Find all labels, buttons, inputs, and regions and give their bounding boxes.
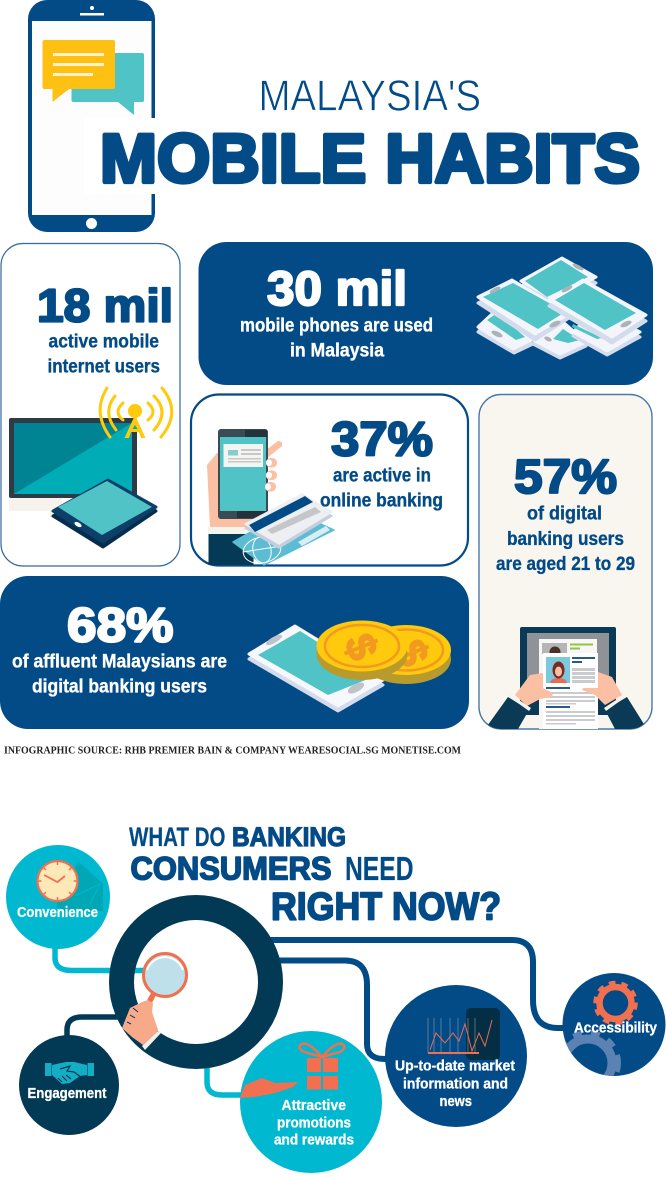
text: infographic source: INFOGRAPHIC SOURCE: RHB PREMIER BAIN & COMPANY WEARESOCIAL.SG MONETISE.COM — [4, 746, 461, 756]
text: mobile phones are used in Malaysia — [240, 316, 433, 362]
node: convenience — [6, 845, 110, 949]
text: are active in online banking: online banking — [320, 490, 443, 512]
node: engagement — [19, 1035, 119, 1135]
label: up-to-date market information and news: news — [440, 1094, 472, 1110]
heading: what do banking consumers need right now: WHAT DO — [129, 822, 226, 852]
icon: phone with market chart — [428, 1008, 500, 1060]
text: of digital banking users are aged 21 to 29: banking users — [507, 529, 624, 550]
stat: 37%: 37% — [331, 414, 433, 466]
label: attractive promotions and rewards: Attractive — [282, 1098, 346, 1114]
heading: what do banking consumers need right now — [129, 822, 501, 928]
node: attractive promotions and rewards — [240, 1031, 382, 1173]
icon: smartphone with gold coins: $ — [335, 627, 388, 666]
icon: monitor, antenna and tablet — [9, 388, 172, 547]
icon: hands holding documents in front of a tablet — [485, 627, 647, 729]
panel: 37% online banking — [191, 394, 468, 567]
title: Mobile Habits: MOBILE HABITS — [100, 120, 640, 197]
icon: hand holding phone with bank cards — [207, 429, 334, 567]
label: attractive promotions and rewards: promotions — [277, 1116, 351, 1132]
text: active mobile internet users — [48, 332, 160, 378]
text: active mobile internet users: active mobile — [48, 332, 159, 352]
icon: magnifying glass and hand — [122, 954, 186, 1050]
label: attractive promotions and rewards — [274, 1098, 354, 1148]
text: mobile phones are used in Malaysia: mobile phones are used — [240, 316, 433, 336]
icon: smartphone with gold coins: $ — [386, 633, 439, 672]
panel: 57% of digital banking users — [479, 394, 652, 729]
label: up-to-date market information and news — [395, 1058, 515, 1110]
icon: envelope and clock — [38, 861, 103, 911]
connector lines — [55, 940, 570, 1095]
panel: 18 mil active mobile internet users — [1, 244, 180, 566]
node: up-to-date market information and news — [385, 985, 527, 1127]
label: up-to-date market information and news: Up-to-date market — [395, 1058, 515, 1074]
stat: 18 mil: 18 mil — [37, 280, 173, 332]
text: mobile phones are used in Malaysia: in Malaysia — [290, 340, 384, 362]
heading: what do banking consumers need right now: RIGHT NOW? — [271, 886, 501, 928]
node: accessibility — [562, 973, 666, 1076]
heading: what do banking consumers need right now: CONSUMERS — [130, 850, 332, 886]
icon: stack of isometric phones — [478, 258, 646, 358]
heading: what do banking consumers need right now: BANKING — [232, 822, 346, 852]
label: accessibility: Accessibility — [574, 1020, 657, 1036]
title: Malaysia's: MALAYSIA'S — [258, 72, 481, 120]
text: active mobile internet users: internet users — [48, 356, 160, 378]
stat: 30 mil: 30 mil — [267, 263, 407, 316]
text: are active in online banking — [320, 466, 443, 512]
icon: handshake — [45, 1062, 94, 1084]
icon: gift on an open hand — [240, 1044, 345, 1098]
text: of digital banking users are aged 21 to 29: of digital — [527, 504, 602, 524]
heading: what do banking consumers need right now: NEED — [345, 850, 414, 887]
text: of digital banking users are aged 21 to 29 — [496, 504, 635, 575]
text: of affluent Malaysians are digital banking users: digital banking users — [32, 676, 207, 698]
label: up-to-date market information and news: information and — [403, 1076, 508, 1092]
label: engagement: Engagement — [28, 1086, 107, 1102]
panel: 68% affluent digital banking users — [0, 576, 469, 729]
ring: central magnifier ring — [122, 908, 270, 1056]
icon: smartphone with gold coins — [249, 620, 451, 711]
stat: 57%: 57% — [514, 451, 617, 504]
icon: gears — [565, 980, 638, 1076]
label: convenience: Convenience — [17, 905, 98, 921]
stat: 68%: 68% — [67, 600, 174, 652]
text: of digital banking users are aged 21 to 29: are aged 21 to 29 — [496, 554, 635, 575]
text: are active in online banking: are active in — [333, 466, 431, 486]
text: of affluent Malaysians are digital banking users — [12, 652, 227, 698]
text: of affluent Malaysians are digital banking users: of affluent Malaysians are — [12, 652, 227, 672]
panel: 30 mil mobile phones — [198, 242, 653, 385]
icon: smartphone with chat bubbles — [28, 0, 156, 232]
label: attractive promotions and rewards: and rewards — [274, 1132, 354, 1148]
